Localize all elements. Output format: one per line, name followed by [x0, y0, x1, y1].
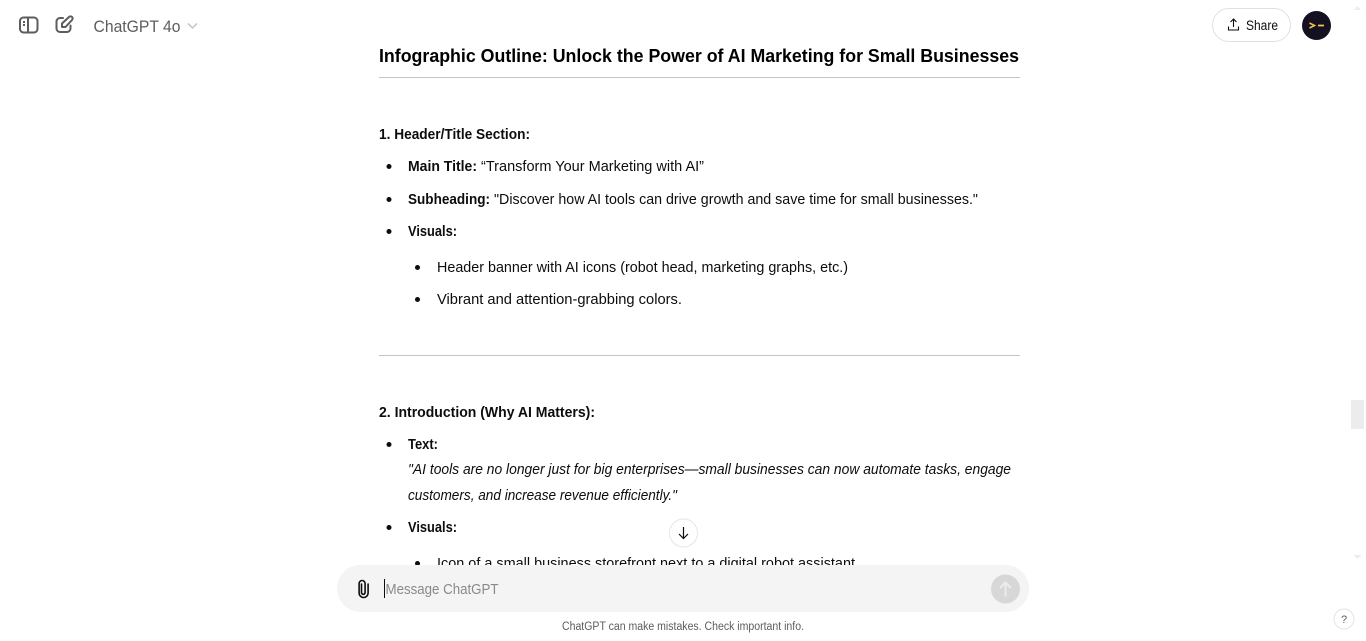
- document title: Infographic Outline: Unlock the Power of AI Marketing for Small Businesses: [379, 45, 1019, 66]
- sub-bullet: storefront icon: Icon of a small business storefront next to a digital robot assistant: [437, 556, 855, 572]
- bullet: text: [386, 437, 1011, 504]
- bullet: text: Text:: [408, 437, 438, 453]
- bullet: subheading: "Discover how AI tools can drive growth and save time for small businesses.": [494, 192, 978, 208]
- input placeholder: Message ChatGPT: [386, 582, 499, 598]
- icon: model chevron: [188, 24, 197, 28]
- bullet: visuals: [386, 224, 457, 240]
- icon: new chat: [56, 16, 73, 32]
- share button: [1212, 8, 1290, 42]
- sub-bullet: header banner: Header banner with AI icons (robot head, marketing graphs, etc.): [437, 260, 848, 276]
- icon: share: [1228, 19, 1238, 30]
- section 2 heading: 2. Introduction (Why AI Matters):: [379, 405, 595, 421]
- section 1 heading: 1. Header/Title Section:: [379, 127, 530, 143]
- top bar: [20, 8, 1331, 42]
- help button: ?: [1341, 614, 1347, 626]
- scroll down button: [670, 519, 698, 547]
- avatar: [1302, 11, 1331, 40]
- share button: Share: [1246, 18, 1278, 33]
- help button: [1334, 609, 1354, 629]
- bullet: text: "AI tools are no longer just for big enterprises—small businesses can now automate tasks, engage: [408, 462, 1011, 478]
- scrollbar: [1351, 6, 1364, 559]
- icon: paperclip: [359, 580, 368, 598]
- sub-bullet: vibrant colors: Vibrant and attention-grabbing colors.: [437, 292, 682, 308]
- section 2: introduction: [379, 405, 1011, 572]
- text caret: [384, 579, 385, 598]
- footer mask: [0, 565, 1366, 641]
- disclaimer: ChatGPT can make mistakes. Check important info.: [562, 621, 804, 633]
- model name: ChatGPT 4o: [94, 18, 180, 36]
- send button: [991, 574, 1020, 604]
- bullet: visuals: [386, 520, 457, 536]
- bullet: main title: Main Title:: [408, 159, 477, 175]
- section 1: header/title section: [379, 127, 978, 308]
- bullet: text: customers, and increase revenue efficiently.": [408, 488, 678, 504]
- icon: sidebar toggle: [20, 18, 38, 32]
- message input: [337, 565, 1029, 612]
- bullet: main title: “Transform Your Marketing with AI”: [481, 159, 704, 175]
- bullet: visuals: Visuals:: [408, 520, 457, 536]
- bullet: visuals: Visuals:: [408, 224, 457, 240]
- bullet: subheading: Subheading:: [408, 192, 490, 208]
